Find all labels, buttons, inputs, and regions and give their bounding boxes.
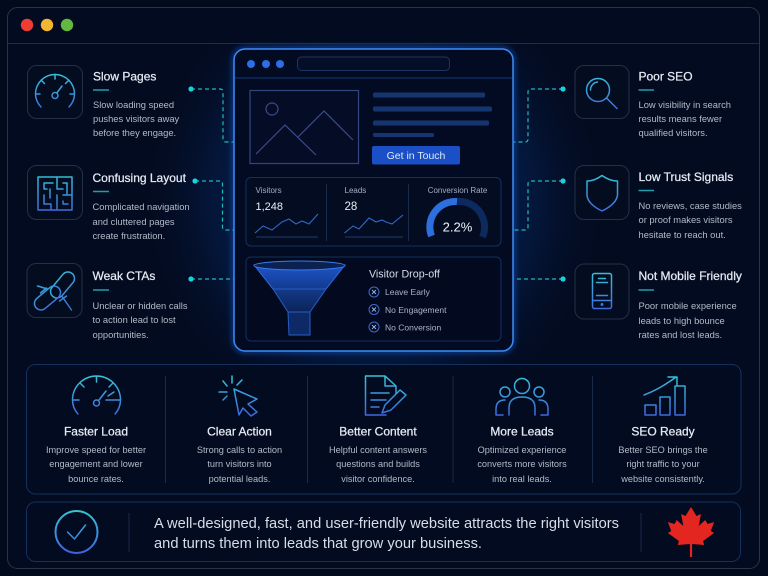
icon: gauge xyxy=(72,376,120,414)
card: Confusing Layout: Complicated navigation xyxy=(92,202,190,212)
stat: Leads xyxy=(344,186,403,237)
stat: Conversion Rate gauge xyxy=(428,186,488,237)
benefit: More Leads xyxy=(477,378,567,484)
card: Weak CTAs: Weak CTAs xyxy=(92,269,155,283)
icon: broken link xyxy=(27,264,82,318)
card: Not Mobile Friendly xyxy=(575,264,742,340)
benefit: Clear Action: potential leads. xyxy=(209,474,270,484)
card: Poor SEO: Poor SEO xyxy=(638,70,693,84)
icon: magnifier xyxy=(575,66,629,118)
connectors right xyxy=(514,86,566,282)
card: Slow Pages xyxy=(28,66,180,138)
panel: benefits xyxy=(26,364,741,494)
card: Confusing Layout: Confusing Layout xyxy=(92,171,187,185)
conclusion text: and turns them into leads that grow your business. xyxy=(154,536,482,552)
benefit: More Leads: Optimized experience xyxy=(478,445,566,455)
stat: Visitors xyxy=(255,186,318,237)
button: Get in Touch xyxy=(372,146,460,164)
stat: Conversion Rate gauge: 2.2% xyxy=(443,220,473,234)
connectors left xyxy=(188,86,234,282)
stat: Leads: 28 xyxy=(344,201,357,213)
panel: stats xyxy=(246,178,501,246)
card: Poor SEO: Low visibility in search xyxy=(638,100,731,110)
benefit: Better Content: visitor confidence. xyxy=(341,474,415,484)
benefit: SEO Ready xyxy=(618,377,708,484)
funnel xyxy=(254,261,345,335)
icon: cursor xyxy=(219,376,257,416)
card: Low Trust Signals: or proof makes visitors xyxy=(638,215,733,225)
benefit: SEO Ready: SEO Ready xyxy=(631,424,695,438)
card: Confusing Layout: and cluttered pages xyxy=(92,217,175,227)
item: No Engagement: No Engagement xyxy=(385,305,447,315)
card: Weak CTAs: Unclear or hidden calls xyxy=(92,301,188,311)
icon: people xyxy=(496,378,548,415)
conclusion text xyxy=(154,516,619,552)
benefit: More Leads: converts more visitors xyxy=(477,459,567,469)
card: Low Trust Signals xyxy=(575,166,742,240)
card: Not Mobile Friendly: Not Mobile Friendly xyxy=(638,269,742,283)
benefit: Better Content: questions and builds xyxy=(336,459,420,469)
image placeholder xyxy=(250,90,358,164)
benefit: Faster Load: Improve speed for better xyxy=(46,445,146,455)
icon: growth chart xyxy=(644,377,685,415)
panel: visitor drop-off xyxy=(246,257,501,341)
benefit: Faster Load: bounce rates. xyxy=(68,474,124,484)
benefit: Clear Action: turn visitors into xyxy=(207,459,272,469)
card: Poor SEO: results means fewer xyxy=(638,114,722,124)
icon: phone xyxy=(575,264,629,319)
card: Weak CTAs xyxy=(27,264,188,340)
stat: Visitors: 1,248 xyxy=(256,201,283,213)
benefit: Faster Load: Faster Load xyxy=(64,424,128,438)
card: Slow Pages: pushes visitors away xyxy=(93,114,180,124)
card: Confusing Layout: create frustration. xyxy=(92,231,165,241)
card: Not Mobile Friendly: rates and lost leads. xyxy=(638,330,722,340)
window control dots xyxy=(21,19,73,31)
item: Leave Early: Leave Early xyxy=(385,287,431,297)
benefit: Clear Action xyxy=(197,376,282,484)
text placeholder lines xyxy=(373,92,492,137)
item: No Conversion: No Conversion xyxy=(385,322,441,332)
icon: maple leaf xyxy=(668,507,714,557)
benefit: Better Content: Helpful content answers xyxy=(329,445,427,455)
icon: maze xyxy=(28,166,82,220)
stat: Leads: Leads xyxy=(344,186,366,195)
conclusion text: A well-designed, fast, and user-friendly website attracts the right visitors xyxy=(154,516,619,532)
card: Poor SEO xyxy=(575,66,731,138)
card: Confusing Layout xyxy=(28,166,190,241)
icon: check circle xyxy=(56,511,98,553)
benefit: Better Content: Better Content xyxy=(339,424,417,438)
panel: conclusion bar xyxy=(26,502,740,562)
stat: Conversion Rate gauge: Conversion Rate xyxy=(428,186,488,195)
card: Slow Pages: before they engage. xyxy=(93,128,176,138)
benefit: SEO Ready: website consistently. xyxy=(620,474,705,484)
button: Get in Touch: Get in Touch xyxy=(387,150,446,162)
card: Weak CTAs: to action lead to lost xyxy=(92,315,176,325)
panel: visitor drop-off: Visitor Drop-off xyxy=(369,268,440,280)
card: Slow Pages: Slow Pages xyxy=(93,70,156,84)
address bar xyxy=(298,57,450,70)
browser dots xyxy=(247,60,284,68)
card: Low Trust Signals: hesitate to reach out. xyxy=(638,230,726,240)
panel: website mockup xyxy=(234,49,513,351)
benefit: Clear Action: Strong calls to action xyxy=(197,445,282,455)
card: Low Trust Signals: No reviews, case studies xyxy=(638,201,742,211)
icon: shield xyxy=(575,166,629,220)
card: Weak CTAs: opportunities. xyxy=(92,330,149,340)
benefit: SEO Ready: Better SEO brings the xyxy=(618,445,708,455)
stat: Visitors: Visitors xyxy=(256,186,282,195)
benefit: SEO Ready: right traffic to your xyxy=(626,459,700,469)
card: Poor SEO: qualified visitors. xyxy=(638,128,708,138)
card: Low Trust Signals: Low Trust Signals xyxy=(638,170,733,184)
icon: document and pencil xyxy=(366,376,406,415)
icon: speedometer xyxy=(28,66,82,118)
benefit: Faster Load: engagement and lower xyxy=(49,459,143,469)
benefit: Better Content xyxy=(329,376,427,484)
benefit: Clear Action: Clear Action xyxy=(207,424,272,438)
benefit: More Leads: More Leads xyxy=(490,424,554,438)
card: Slow Pages: Slow loading speed xyxy=(93,100,174,110)
benefit: More Leads: into real leads. xyxy=(492,474,552,484)
card: Not Mobile Friendly: leads to high bounce xyxy=(638,316,725,326)
benefit: Faster Load xyxy=(46,376,146,484)
card: Not Mobile Friendly: Poor mobile experience xyxy=(638,301,737,311)
